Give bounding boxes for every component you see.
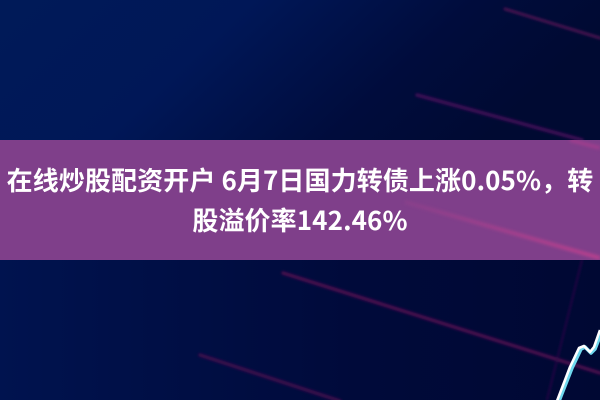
- title: [7, 161, 593, 238]
- white price line: [557, 330, 600, 400]
- purple title band: [0, 140, 600, 260]
- title: 股溢价率142.46%: [192, 201, 408, 238]
- title: 在线炒股配资开户 6月7日国力转债上涨0.05%，转: [7, 161, 593, 198]
